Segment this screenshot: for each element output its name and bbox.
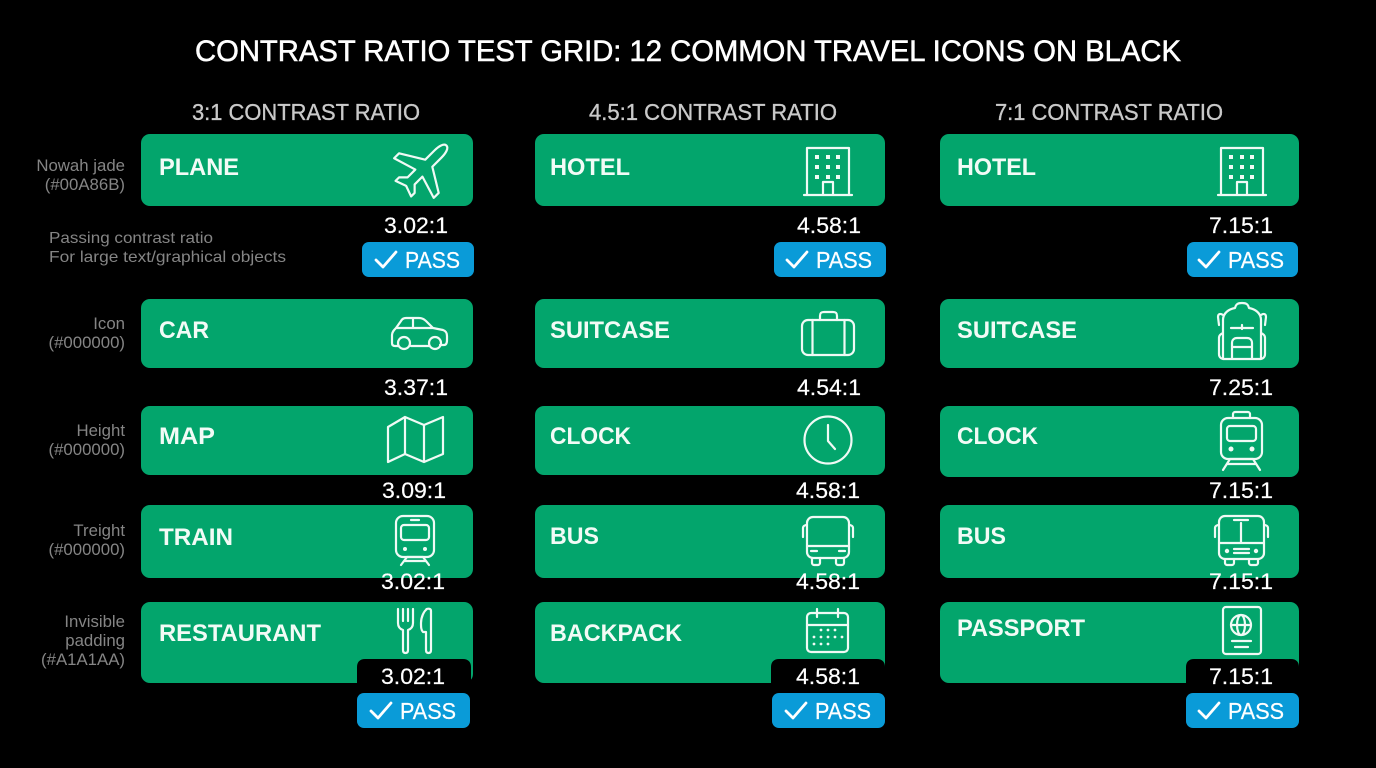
side note: passing contrast ratio: For large text/graphical objects (49, 249, 286, 266)
card: backpack: BACKPACK (550, 620, 683, 647)
side label: Treight: Treight (73, 521, 125, 540)
card: bus (7:1): BUS (957, 523, 1006, 550)
pass badge: plane: PASS (405, 247, 460, 273)
ratio values: 7:1 column: 7.25:1 (1209, 375, 1273, 400)
side label: Icon: Icon (93, 314, 125, 333)
ratio values: 4.5:1 column: 4.58:1 (796, 664, 860, 689)
ratio values: 7:1 column: 7.15:1 (1209, 569, 1273, 594)
side label: Invisible padding: (#A1A1AA) (41, 650, 125, 669)
ratio values: 7:1 column: 7.15:1 (1209, 213, 1273, 238)
card: hotel (4.5:1) (535, 134, 885, 206)
card: clock (7:1) (940, 406, 1299, 477)
ratio values: 3:1 column: 3.02:1 (381, 569, 445, 594)
icon: clock (804, 416, 852, 464)
card: map (141, 406, 473, 475)
card: clock: CLOCK (550, 423, 632, 450)
side label: Nowah jade: Nowah jade (36, 156, 125, 175)
column heading: 3:1: 3:1 CONTRAST RATIO (192, 99, 420, 125)
icon: plane (384, 126, 466, 208)
icon: train (396, 516, 434, 565)
icon: hotel (1218, 148, 1266, 195)
column heading: 7:1: 7:1 CONTRAST RATIO (995, 99, 1223, 125)
pass badge: hotel 7:1 (1187, 242, 1298, 277)
ratio values: 3:1 column: 3.02:1 (384, 213, 448, 238)
card: hotel (7:1): HOTEL (957, 154, 1036, 181)
card: bus (4.5:1) (535, 505, 885, 578)
pass badge: hotel 7:1: PASS (1228, 247, 1284, 273)
side label: Nowah jade (36, 156, 125, 194)
ratio values: 3:1 column: 3.37:1 (384, 375, 448, 400)
side label: Icon (48, 314, 125, 352)
pass badge: passport (1186, 693, 1299, 728)
notch: restaurant ratio (357, 659, 471, 684)
card: plane (141, 126, 473, 208)
card: hotel (7:1) (940, 134, 1299, 206)
icon: car (392, 318, 447, 349)
pass badge: restaurant: PASS (400, 698, 456, 724)
pass badge: hotel 4.5:1: PASS (816, 247, 872, 273)
icon: suitcase (802, 312, 854, 355)
card: restaurant (141, 602, 473, 683)
ratio values: 4.5:1 column: 4.58:1 (796, 569, 860, 594)
icon: passport (1223, 607, 1261, 654)
card: car: CAR (159, 317, 209, 344)
ratio values: 3:1 column: 3.09:1 (382, 478, 446, 503)
side label: Invisible padding: Invisible (64, 612, 125, 631)
side note: passing contrast ratio: Passing contrast ratio (49, 230, 213, 247)
icon: bus (803, 517, 853, 565)
icon: train (1221, 412, 1262, 470)
card: clock (7:1): CLOCK (957, 423, 1039, 450)
pass badge: hotel 4.5:1 (774, 242, 886, 277)
ratio values: 7:1 column (1209, 213, 1273, 689)
card: bus (4.5:1): BUS (550, 523, 599, 550)
icon: backpack (1218, 303, 1266, 359)
side label: Invisible padding: padding (65, 631, 125, 650)
card: passport: PASSPORT (957, 615, 1085, 642)
ratio values: 7:1 column: 7.15:1 (1209, 478, 1273, 503)
card: suitcase (4.5:1): SUITCASE (550, 317, 670, 344)
card: bus (7:1) (940, 505, 1299, 578)
pass badge: backpack: PASS (815, 698, 871, 724)
pass badge: restaurant (357, 693, 470, 728)
ratio values: 4.5:1 column: 4.54:1 (797, 375, 861, 400)
side label: Height: (#000000) (48, 440, 125, 459)
side note: passing contrast ratio (49, 230, 286, 266)
ratio values: 7:1 column: 7.15:1 (1209, 664, 1273, 689)
icon: map (388, 417, 443, 462)
card: restaurant: RESTAURANT (159, 620, 321, 647)
pass badge: passport: PASS (1228, 698, 1284, 724)
ratio values: 4.5:1 column: 4.58:1 (797, 213, 861, 238)
side label: Invisible padding (41, 612, 125, 669)
card: train (141, 505, 473, 578)
card: hotel (4.5:1): HOTEL (550, 154, 630, 181)
card: plane: PLANE (159, 154, 239, 181)
notch: backpack ratio (771, 659, 885, 684)
side label: Treight (48, 521, 125, 559)
ratio values: 3:1 column: 3.02:1 (381, 664, 445, 689)
pass badge: plane (362, 242, 474, 277)
title: CONTRAST RATIO TEST GRID: 12 COMMON TRAVEL ICONS ON BLACK (195, 35, 1181, 68)
icon: calendar (807, 609, 848, 652)
card: suitcase (4.5:1) (535, 299, 885, 368)
card: map: MAP (159, 423, 215, 450)
ratio values: 4.5:1 column (796, 213, 861, 689)
side label: Treight: (#000000) (48, 540, 125, 559)
side label: Nowah jade: (#00A86B) (45, 175, 125, 194)
card: train: TRAIN (159, 524, 233, 551)
icon: fork and knife (398, 609, 431, 653)
ratio values: 4.5:1 column: 4.58:1 (796, 478, 860, 503)
card: clock (535, 406, 885, 475)
pass badge: backpack (772, 693, 885, 728)
side label: Height: Height (76, 421, 125, 440)
side label: Icon: (#000000) (48, 333, 125, 352)
card: backpack (535, 602, 885, 683)
ratio values: 3:1 column (381, 213, 448, 689)
card: passport (940, 602, 1299, 683)
card: suitcase (7:1): SUITCASE (957, 317, 1077, 344)
icon: hotel (804, 148, 852, 195)
card: suitcase (7:1) (940, 299, 1299, 368)
notch: passport ratio (1186, 659, 1299, 684)
column heading: 4.5:1: 4.5:1 CONTRAST RATIO (589, 99, 837, 125)
card: car (141, 299, 473, 368)
icon: bus (1215, 516, 1268, 565)
side label: Height (48, 421, 125, 459)
